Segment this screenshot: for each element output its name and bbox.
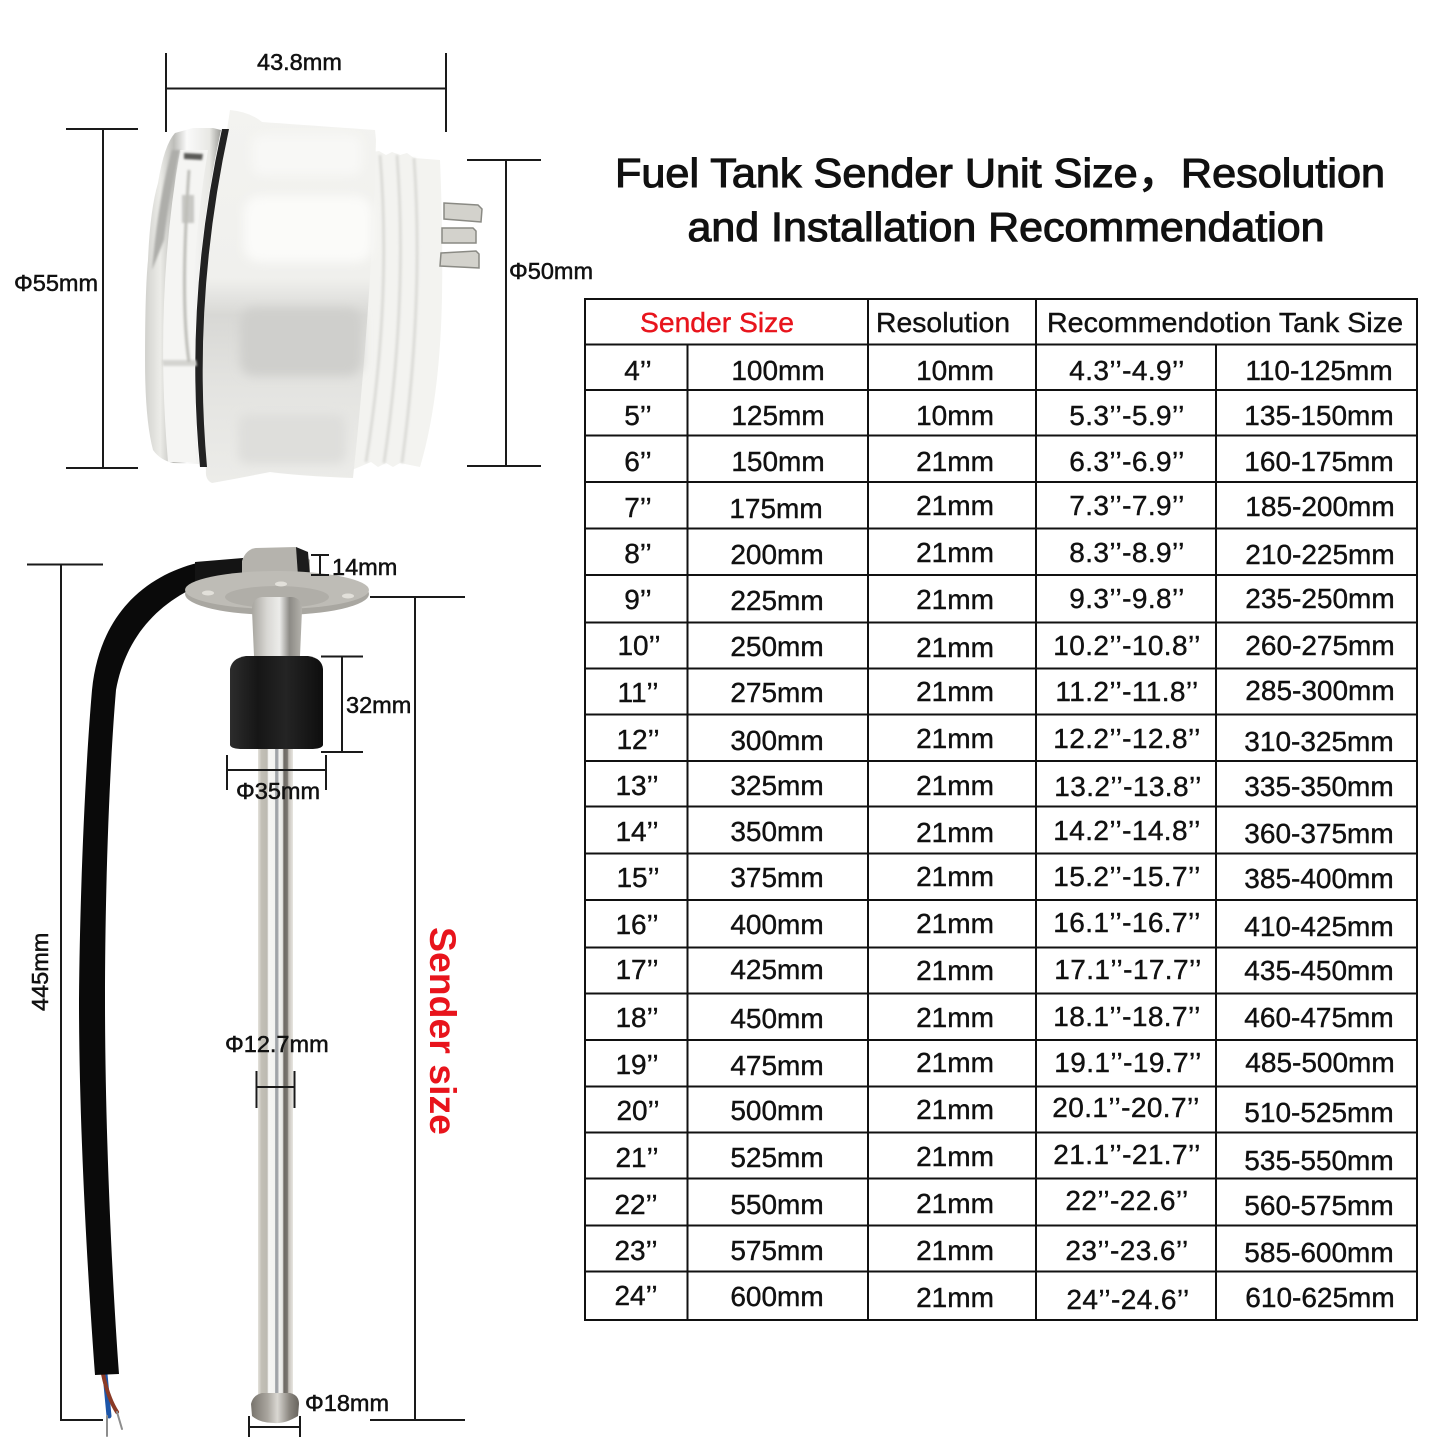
row 15 inch [616, 861, 1394, 894]
dimension: diameter 12.7mm [225, 1031, 329, 1108]
row 9 inch: 9’’ [624, 584, 652, 615]
row 12 inch: 300mm [730, 725, 824, 756]
row 10 inch: 10.2’’-10.8’’ [1053, 630, 1201, 661]
row 9 inch: 225mm [730, 585, 824, 616]
row 19 inch: 19.1’’-19.7’’ [1054, 1047, 1202, 1078]
row 22 inch: 21mm [916, 1188, 994, 1219]
row 14 inch: 14’’ [615, 816, 659, 847]
row 16 inch: 16.1’’-16.7’’ [1053, 907, 1201, 938]
row 17 inch: 425mm [730, 954, 824, 985]
row 12 inch: 21mm [916, 723, 994, 754]
label: Sender size: Sender size [422, 927, 463, 1135]
dimension: diameter 18mm: Φ18mm [305, 1390, 389, 1416]
dimension: diameter 50mm [467, 160, 593, 466]
row 13 inch: 13’’ [615, 770, 659, 801]
row 16 inch: 400mm [730, 909, 824, 940]
row 16 inch: 410-425mm [1244, 911, 1394, 942]
row 12 inch: 12’’ [616, 724, 660, 755]
row 18 inch: 18.1’’-18.7’’ [1053, 1001, 1201, 1032]
gauge: spade terminals [440, 203, 482, 268]
row 22 inch: 22’’ [614, 1189, 658, 1220]
row 10 inch: 10’’ [617, 630, 661, 661]
row 4 inch: 4’’ [624, 355, 652, 386]
row 9 inch: 235-250mm [1245, 583, 1395, 614]
row 24 inch: 24’’-24.6’’ [1066, 1284, 1190, 1315]
row 11 inch: 11.2’’-11.8’’ [1055, 676, 1199, 707]
row 14 inch: 360-375mm [1244, 818, 1394, 849]
row 5 inch: 5.3’’-5.9’’ [1069, 400, 1185, 431]
row 16 inch: 16’’ [615, 909, 659, 940]
row 23 inch: 575mm [730, 1235, 824, 1266]
table: sender size, resolution and recommended tank size [585, 299, 1417, 1320]
row 4 inch: 110-125mm [1245, 355, 1393, 386]
row 8 inch: 21mm [916, 537, 994, 568]
gauge: bezel reflections [152, 150, 203, 366]
row 6 inch [624, 446, 1394, 477]
row 4 inch [624, 355, 1393, 386]
row 6 inch: 6’’ [624, 446, 652, 477]
row 17 inch [615, 954, 1394, 986]
row 12 inch: 310-325mm [1244, 726, 1394, 757]
dimension: diameter 35mm [227, 755, 326, 804]
row 21 inch: 21mm [916, 1141, 994, 1172]
row 15 inch: 375mm [730, 862, 824, 893]
row 10 inch: 260-275mm [1245, 630, 1395, 661]
table header: Resolution [876, 307, 1010, 338]
dimension: diameter 12.7mm: Φ12.7mm [225, 1031, 329, 1057]
row 18 inch: 18’’ [615, 1002, 659, 1033]
row 22 inch: 550mm [730, 1189, 824, 1220]
dimension: 43.8mm width: 43.8mm [257, 49, 342, 75]
row 13 inch: 21mm [916, 770, 994, 801]
row 16 inch: 21mm [916, 908, 994, 939]
row 20 inch: 20.1’’-20.7’’ [1052, 1092, 1200, 1123]
row 14 inch: 350mm [730, 816, 824, 847]
sender product photo illustration [79, 547, 369, 1436]
row 18 inch [615, 1001, 1394, 1034]
row 6 inch: 21mm [916, 446, 994, 477]
row 11 inch: 21mm [916, 676, 994, 707]
row 9 inch: 9.3’’-9.8’’ [1069, 583, 1185, 614]
gauge: threaded rear section [352, 151, 442, 470]
row 13 inch: 13.2’’-13.8’’ [1054, 771, 1202, 802]
row 23 inch [614, 1235, 1394, 1268]
row 22 inch [614, 1185, 1394, 1221]
row 4 inch: 10mm [916, 355, 994, 386]
row 15 inch: 385-400mm [1244, 863, 1394, 894]
table header: Recommendotion Tank Size [1047, 307, 1403, 338]
row 9 inch: 21mm [916, 584, 994, 615]
row 19 inch: 485-500mm [1245, 1047, 1395, 1078]
row 21 inch: 21’’ [615, 1142, 659, 1173]
row 23 inch: 23’’ [614, 1235, 658, 1266]
row 12 inch [616, 723, 1394, 757]
row 19 inch: 19’’ [615, 1049, 659, 1080]
dimension: 445mm overall [27, 564, 103, 1420]
row 7 inch: 175mm [729, 493, 823, 524]
row 20 inch: 510-525mm [1244, 1097, 1394, 1128]
dimension: diameter 18mm [249, 1390, 389, 1437]
sender: neck [252, 597, 302, 656]
sender: stripped wires [103, 1374, 122, 1436]
row 13 inch: 335-350mm [1244, 771, 1394, 802]
row 21 inch: 535-550mm [1244, 1145, 1394, 1176]
row 8 inch: 210-225mm [1245, 539, 1395, 570]
row 8 inch: 200mm [730, 539, 824, 570]
sender: end stop [251, 1393, 299, 1423]
sender: rod [258, 745, 293, 1400]
dimension: sender size span [370, 597, 465, 1420]
row 7 inch: 21mm [916, 490, 994, 521]
row 19 inch: 475mm [730, 1050, 824, 1081]
sender: black float [230, 656, 323, 749]
gauge: chrome bezel [145, 128, 221, 464]
row 18 inch: 460-475mm [1244, 1002, 1394, 1033]
row 8 inch: 8’’ [624, 538, 652, 569]
gauge: bezel chrome band [163, 150, 208, 462]
title [615, 150, 1385, 250]
dimension: 14mm: 14mm [332, 554, 397, 580]
row 9 inch [624, 583, 1395, 616]
row 6 inch: 6.3’’-6.9’’ [1069, 446, 1185, 477]
row 17 inch: 17.1’’-17.7’’ [1054, 954, 1202, 985]
row 13 inch: 325mm [730, 770, 824, 801]
row 15 inch: 15’’ [616, 862, 660, 893]
row 14 inch: 21mm [916, 817, 994, 848]
row 15 inch: 21mm [916, 861, 994, 892]
row 18 inch: 450mm [730, 1003, 824, 1034]
row 20 inch: 20’’ [616, 1095, 660, 1126]
row 7 inch: 7’’ [624, 492, 652, 523]
sender: flange [185, 571, 369, 615]
row 24 inch: 600mm [730, 1281, 824, 1312]
row 5 inch: 10mm [916, 400, 994, 431]
gauge: body shading panels [238, 135, 372, 464]
row 17 inch: 17’’ [615, 954, 659, 985]
row 11 inch: 11’’ [617, 677, 659, 708]
row 10 inch: 21mm [916, 632, 994, 663]
sender: black cable [79, 563, 198, 1375]
dimension: diameter 55mm [14, 129, 138, 468]
table header: Sender Size [640, 307, 794, 338]
gauge product photo illustration [145, 110, 482, 483]
dimension: 43.8mm width [166, 49, 446, 132]
row 5 inch: 5’’ [624, 400, 652, 431]
row 8 inch: 8.3’’-8.9’’ [1069, 537, 1185, 568]
row 11 inch: 285-300mm [1245, 675, 1395, 706]
dimension: diameter 55mm: Φ55mm [14, 270, 98, 296]
table grid [585, 299, 1417, 1320]
row 23 inch: 585-600mm [1244, 1237, 1394, 1268]
sender: cable sleeve [195, 558, 243, 588]
row 17 inch: 435-450mm [1244, 955, 1394, 986]
row 10 inch: 250mm [730, 631, 824, 662]
row 5 inch: 125mm [731, 400, 825, 431]
title: and Installation Recommendation [688, 204, 1324, 250]
row 15 inch: 15.2’’-15.7’’ [1053, 861, 1201, 892]
row 24 inch: 21mm [916, 1282, 994, 1313]
row 24 inch: 24’’ [614, 1280, 658, 1311]
dimension: 445mm overall: 445mm [27, 933, 53, 1011]
title: Fuel Tank Sender Unit Size，Resolution [615, 150, 1385, 196]
row 5 inch [624, 400, 1394, 431]
row 22 inch: 560-575mm [1244, 1190, 1394, 1221]
row 19 inch: 21mm [916, 1047, 994, 1078]
row 12 inch: 12.2’’-12.8’’ [1053, 723, 1201, 754]
row 4 inch: 4.3’’-4.9’’ [1069, 355, 1185, 386]
table header [640, 307, 1403, 338]
row 11 inch: 275mm [730, 677, 824, 708]
row 14 inch: 14.2’’-14.8’’ [1053, 815, 1201, 846]
row 16 inch [615, 907, 1394, 942]
row 20 inch: 21mm [916, 1094, 994, 1125]
row 6 inch: 160-175mm [1244, 446, 1394, 477]
row 14 inch [615, 815, 1394, 849]
row 8 inch [624, 537, 1395, 570]
row 10 inch [617, 630, 1395, 663]
row 20 inch [616, 1092, 1394, 1128]
gauge: black o-ring [195, 129, 229, 467]
row 24 inch: 610-625mm [1245, 1282, 1395, 1313]
row 21 inch: 21.1’’-21.7’’ [1053, 1139, 1201, 1170]
dimension: diameter 50mm: Φ50mm [509, 258, 593, 284]
dimension: 32mm: 32mm [346, 692, 411, 718]
gauge: white body [199, 110, 376, 483]
row 24 inch [614, 1280, 1395, 1315]
row 21 inch [615, 1139, 1394, 1176]
row 20 inch: 500mm [730, 1095, 824, 1126]
row 11 inch [617, 675, 1395, 708]
row 23 inch: 21mm [916, 1235, 994, 1266]
dimension: 32mm [321, 656, 411, 752]
row 6 inch: 150mm [731, 446, 825, 477]
row 18 inch: 21mm [916, 1002, 994, 1033]
row 17 inch: 21mm [916, 955, 994, 986]
row 4 inch: 100mm [731, 355, 825, 386]
row 7 inch [624, 490, 1395, 524]
row 7 inch: 7.3’’-7.9’’ [1069, 490, 1185, 521]
row 7 inch: 185-200mm [1245, 491, 1395, 522]
dimension: diameter 35mm: Φ35mm [236, 778, 320, 804]
row 13 inch [615, 770, 1394, 802]
sender: junction block [242, 547, 310, 576]
row 21 inch: 525mm [730, 1142, 824, 1173]
row 19 inch [615, 1047, 1395, 1081]
row 5 inch: 135-150mm [1244, 400, 1394, 431]
row 22 inch: 22’’-22.6’’ [1065, 1185, 1189, 1216]
row 23 inch: 23’’-23.6’’ [1065, 1235, 1189, 1266]
